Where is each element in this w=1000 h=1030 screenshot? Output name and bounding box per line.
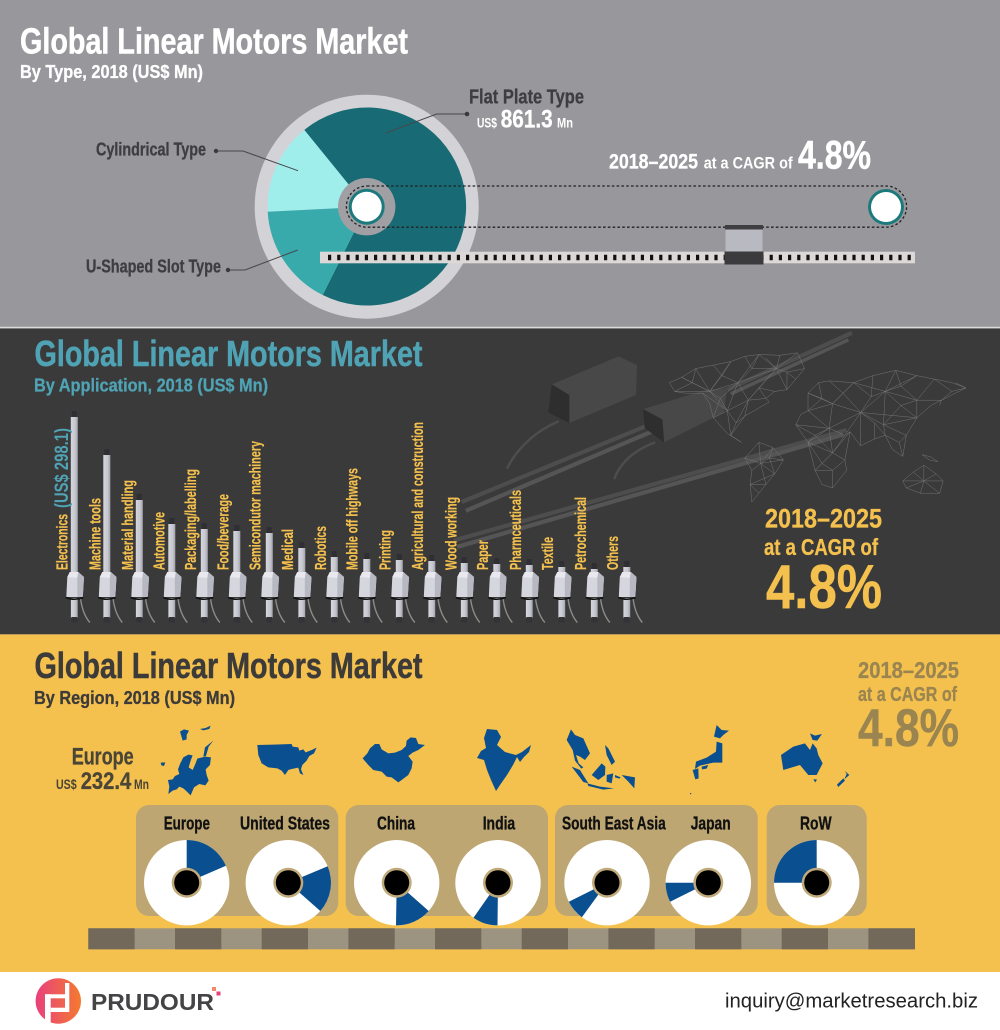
bar: Medical: Medical xyxy=(280,529,297,570)
bar: Medical xyxy=(280,529,317,622)
map: South East Asia xyxy=(567,729,635,790)
callout: Europe value: 232.4 xyxy=(81,768,132,795)
cagr callout: by type: 2018–2025 xyxy=(609,150,698,173)
label: flat plate type: Mn xyxy=(557,115,573,131)
right pulley xyxy=(868,189,904,225)
cagr callout: by application: at a CAGR of xyxy=(764,534,878,560)
section background: by type xyxy=(0,0,1000,328)
donut: Europe xyxy=(144,840,229,925)
bar: Agricultural and construction xyxy=(410,422,447,622)
map: United States xyxy=(257,744,317,775)
cagr callout: by region: at a CAGR of xyxy=(858,684,957,706)
bar: Material handling: Material handling xyxy=(120,480,137,570)
bar: Packaging/labelling: Packaging/labelling xyxy=(183,469,200,570)
bar: Food/beverage: Food/beverage xyxy=(216,494,232,570)
label: cylindrical type: Cylindrical Type xyxy=(96,139,206,160)
donut: RoW xyxy=(774,840,859,925)
callout: Europe value: US$ xyxy=(56,776,77,792)
title: by type: Global Linear Motors Market xyxy=(20,20,408,61)
donut: Japan xyxy=(666,840,751,925)
cagr callout: by type xyxy=(609,133,871,177)
map: Australia and New Zealand xyxy=(781,733,849,787)
panel: China and India: India xyxy=(483,813,516,833)
logo: Prudour xyxy=(36,978,220,1024)
bar: Automotive xyxy=(152,512,187,622)
bar: Petrochemical xyxy=(573,497,610,622)
bar: Electronics xyxy=(52,411,90,622)
bar: Material handling xyxy=(120,480,155,622)
title: by application: Global Linear Motors Market xyxy=(34,333,423,374)
panel: South East Asia and Japan: South East Asia xyxy=(562,813,666,833)
section background: by application xyxy=(0,328,1000,634)
bar: Wood working: Wood working xyxy=(444,497,460,570)
cagr callout: by application xyxy=(764,504,882,622)
panel: China and India xyxy=(346,805,548,916)
label: u-shaped slot type: U-Shaped Slot Type xyxy=(86,256,221,277)
bar: Wood working xyxy=(444,497,480,622)
bar: Semicondutor machinery: Semicondutor machinery xyxy=(248,441,264,570)
cagr callout: by type: at a CAGR of xyxy=(704,153,793,172)
slider carriage xyxy=(724,225,764,264)
bar: Machine tools: Machine tools xyxy=(88,498,105,570)
logo: Prudour: PRUDOUR xyxy=(91,989,214,1015)
section background: by region xyxy=(0,634,1000,972)
donut: India xyxy=(455,840,541,925)
bar: Textile xyxy=(540,537,577,622)
cagr callout: by application: 2018–2025 xyxy=(765,504,882,534)
rail with teeth xyxy=(320,252,915,263)
panel: Europe and United States: Europe xyxy=(164,813,210,833)
bar: Pharmceuticals: Pharmceuticals xyxy=(508,490,525,570)
label: flat plate type xyxy=(386,86,584,134)
bar: Printing: Printing xyxy=(378,530,394,570)
label: flat plate type: 861.3 xyxy=(501,106,553,134)
cagr callout: by application: 4.8% xyxy=(766,553,882,622)
donut: China xyxy=(354,840,439,925)
bar: Textile: Textile xyxy=(540,537,557,570)
label: u-shaped slot type xyxy=(86,250,298,277)
bar: Semicondutor machinery xyxy=(248,441,285,622)
bar: Machine tools xyxy=(88,449,122,622)
bar: Paper: Paper xyxy=(475,540,492,570)
bar: Pharmceuticals xyxy=(508,490,545,622)
cagr callout: by region: 2018–2025 xyxy=(858,657,959,683)
map: Japan xyxy=(690,725,729,794)
bar: Agricultural and construction: Agricultural and construction xyxy=(410,422,427,570)
bar: Printing xyxy=(378,530,415,622)
pie chart: market by type xyxy=(255,95,479,319)
panel: Europe and United States xyxy=(136,805,338,916)
bar: Robotics xyxy=(313,526,350,622)
bar: Mobile off highways xyxy=(344,468,382,622)
subtitle: by region: By Region, 2018 (US$ Mn) xyxy=(34,687,235,708)
map: Europe xyxy=(161,726,213,795)
bar: Electronics: (US$ 298.1) xyxy=(52,428,73,508)
cagr callout: by region: 4.8% xyxy=(858,699,959,758)
subtitle: by application: By Application, 2018 (US$ Mn) xyxy=(34,375,268,396)
donut: United States xyxy=(246,840,331,925)
bar: Automotive: Automotive xyxy=(152,512,168,570)
bar: Robotics: Robotics xyxy=(313,526,330,570)
callout: Europe value: Mn xyxy=(134,776,149,792)
callout: Europe value: Europe xyxy=(72,743,134,770)
map: China xyxy=(363,737,425,782)
label: flat plate type: US$ xyxy=(477,115,497,131)
cagr callout: by type: 4.8% xyxy=(798,133,871,177)
bar: Petrochemical: Petrochemical xyxy=(573,497,590,570)
map: India xyxy=(477,729,531,791)
panel: RoW xyxy=(767,805,867,916)
cagr callout: by region xyxy=(858,657,959,758)
label: flat plate type: Flat Plate Type xyxy=(469,86,584,108)
panel: China and India: China xyxy=(377,813,416,833)
callout: Europe value xyxy=(56,743,149,795)
bar: Mobile off highways: Mobile off highways xyxy=(344,468,362,570)
bar: Packaging/labelling xyxy=(183,469,220,622)
bar: Others xyxy=(605,536,642,622)
bar: Paper xyxy=(475,540,512,622)
striped conveyor xyxy=(88,928,915,949)
bar: Food/beverage xyxy=(216,494,252,622)
background: faded linear motors and polygon world map xyxy=(454,333,966,547)
donut: South East Asia xyxy=(564,840,650,925)
contact email: inquiry@marketresearch.biz xyxy=(725,990,978,1012)
bar: Others: Others xyxy=(605,536,622,570)
label: cylindrical type xyxy=(96,139,298,171)
panel: South East Asia and Japan xyxy=(555,805,758,916)
pulley belt xyxy=(346,186,907,227)
bar: Electronics: Electronics xyxy=(55,514,72,570)
section background: footer xyxy=(0,972,1000,1030)
title: by region: Global Linear Motors Market xyxy=(34,645,423,686)
subtitle: by type: By Type, 2018 (US$ Mn) xyxy=(20,61,203,82)
panel: RoW: RoW xyxy=(800,813,832,833)
panel: Europe and United States: United States xyxy=(240,813,330,833)
panel: South East Asia and Japan: Japan xyxy=(691,813,731,833)
